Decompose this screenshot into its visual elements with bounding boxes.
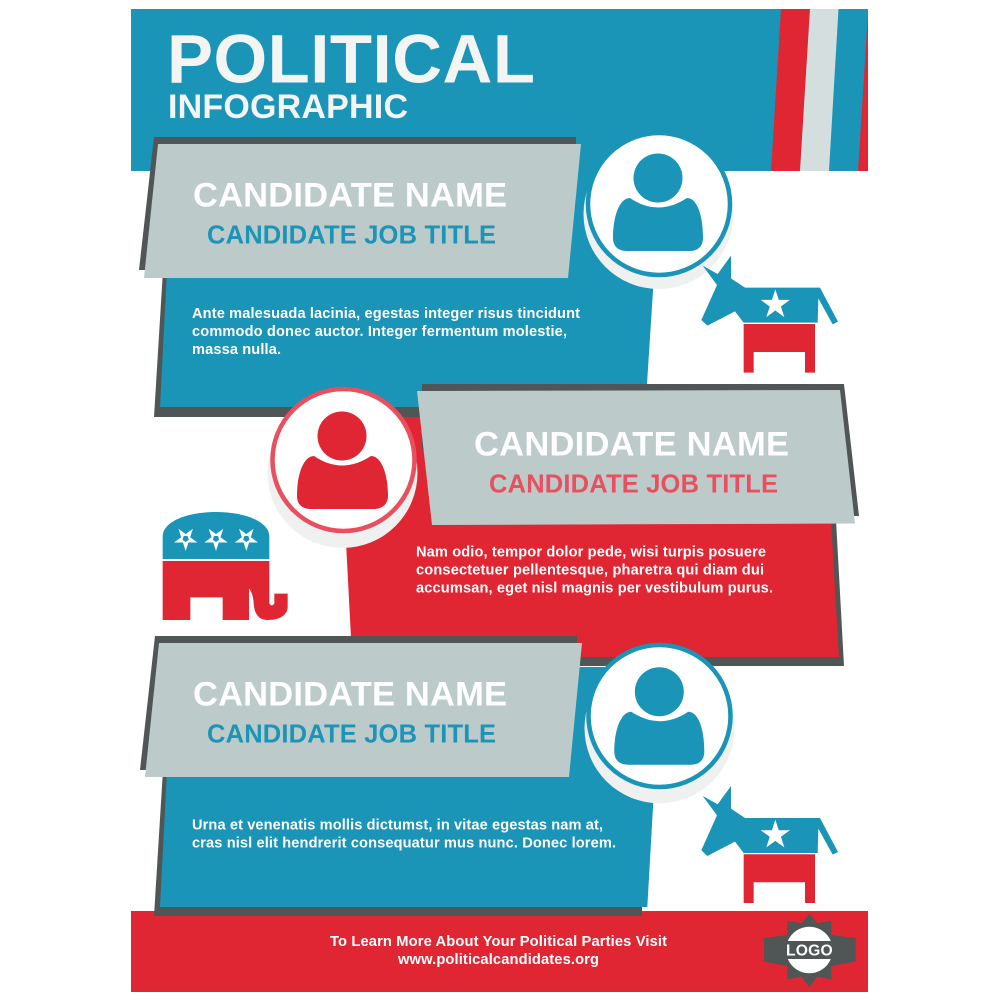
title: INFOGRAPHIC: [168, 88, 408, 126]
header band: [131, 9, 868, 171]
icon: candidate 2 portrait: [268, 389, 418, 548]
icon: candidate 1 portrait: [584, 133, 734, 289]
panel: candidate 1 body: [154, 167, 661, 417]
footer band: To Learn More About Your Political Parties Visit: [330, 934, 667, 950]
icon: candidate 3 portrait: [584, 645, 734, 803]
panel: candidate 3 name plate: [140, 636, 582, 777]
panel: candidate 3 body: [154, 667, 661, 916]
panel: candidate 3 body: Urna et venenatis mollis dictumst, in vitae egestas nam at,: [192, 818, 603, 834]
panel: candidate 2 body: accumsan, eget nisl magnis per vestibulum purus.: [416, 580, 773, 596]
panel: candidate 1 name plate: [139, 137, 581, 278]
icon: donkey 1: [701, 256, 838, 373]
panel: candidate 2 name plate: [417, 384, 859, 525]
panel: candidate 2 body: [340, 417, 844, 666]
title: POLITICAL: [167, 20, 535, 98]
icon: elephant: [163, 512, 288, 620]
panel: candidate 1 name plate: CANDIDATE NAME: [193, 176, 507, 214]
panel: candidate 1 body: Ante malesuada lacinia, egestas integer risus tincidunt: [192, 306, 580, 322]
panel: candidate 1 name plate: CANDIDATE JOB TITLE: [207, 222, 496, 250]
footer band: [131, 911, 868, 992]
panel: candidate 1 body: massa nulla.: [192, 342, 281, 358]
panel: candidate 3 name plate: CANDIDATE JOB TITLE: [207, 720, 496, 748]
panel: candidate 1 body: commodo donec auctor. Integer fermentum molestie,: [192, 324, 567, 340]
panel: candidate 3 body: cras nisl elit hendrerit consequatur mus nunc. Donec lorem.: [192, 836, 616, 852]
panel: candidate 2 name plate: CANDIDATE JOB TITLE: [489, 470, 778, 498]
panel: candidate 2 body: consectetuer pellentesque, pharetra qui diam dui: [416, 562, 764, 578]
icon: donkey 2: [701, 786, 838, 903]
footer band: www.politicalcandidates.org: [397, 952, 599, 968]
panel: candidate 3 name plate: CANDIDATE NAME: [193, 676, 507, 714]
icon: logo badge: [764, 913, 856, 987]
icon: logo badge: LOGO: [786, 942, 833, 959]
panel: candidate 2 body: Nam odio, tempor dolor pede, wisi turpis posuere: [416, 544, 766, 560]
panel: candidate 2 name plate: CANDIDATE NAME: [474, 426, 789, 464]
